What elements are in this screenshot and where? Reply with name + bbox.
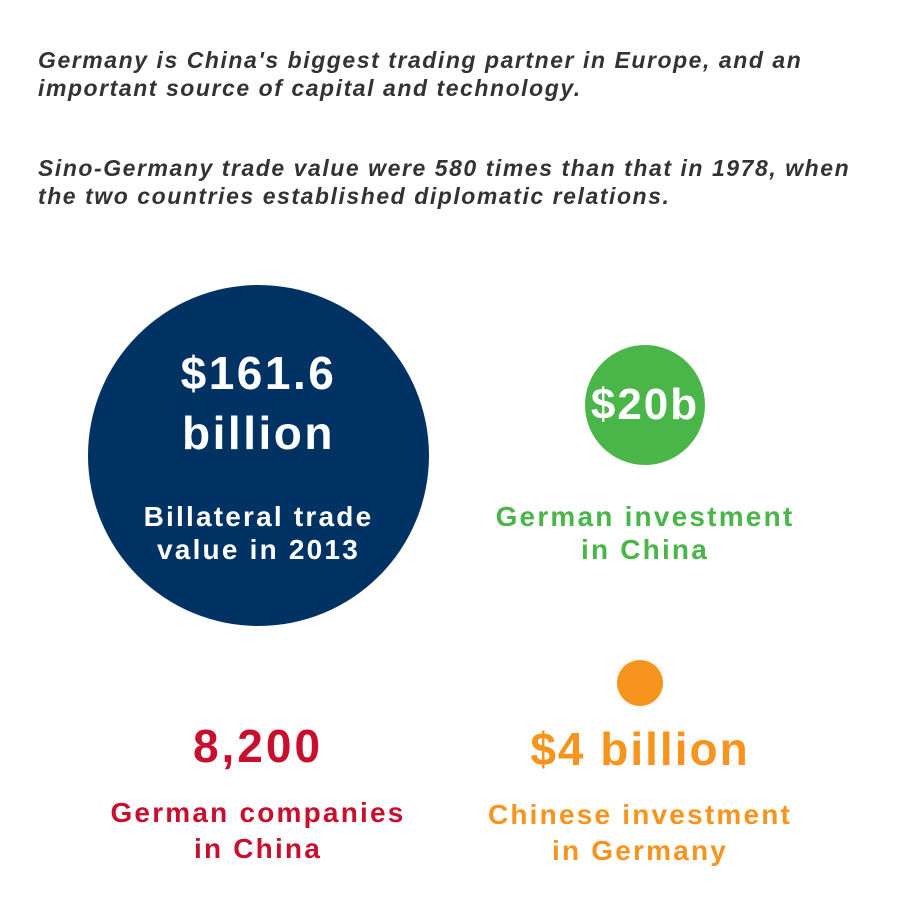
label: bilateral trade: Billateral trade: [144, 501, 373, 532]
label: bilateral trade: value in 2013: [157, 534, 360, 565]
panel: bilateral trade circle: [88, 285, 429, 626]
label: bilateral trade: [144, 501, 373, 565]
value: 8,200: 8,200: [193, 720, 323, 772]
intro text 1: [38, 47, 802, 101]
label: Chinese investment in Germany: Chinese investment: [488, 799, 792, 830]
label: German investment in China: [496, 501, 794, 565]
intro text 2: the two countries established diplomatic relations.: [38, 183, 670, 209]
label: German companies in China: German companies: [110, 797, 406, 828]
label: German companies in China: in China: [194, 833, 322, 864]
intro text 1: important source of capital and technology.: [38, 75, 582, 101]
green circle with $20b: $20b: [591, 380, 699, 429]
value: $161.6 billion: billion: [182, 407, 335, 459]
label: German companies in China: [110, 797, 406, 864]
value: $161.6 billion: [181, 347, 336, 459]
value: $161.6 billion: $161.6: [181, 347, 336, 399]
label: Chinese investment in Germany: in Germany: [552, 835, 728, 866]
panel: German companies: [110, 720, 406, 864]
label: Chinese investment in Germany: [488, 799, 792, 866]
intro text 1: Germany is China's biggest trading partner in Europe, and an: [38, 47, 802, 73]
panel: German investment: [496, 345, 794, 565]
panel: Chinese investment: [488, 660, 792, 866]
label: German investment in China: in China: [581, 534, 709, 565]
orange dot: [617, 660, 663, 706]
value: $4 billion: $4 billion: [530, 723, 750, 775]
green circle with $20b: [585, 345, 705, 465]
intro text 2: Sino-Germany trade value were 580 times than that in 1978, when: [38, 155, 850, 181]
intro text 2: [38, 155, 850, 209]
label: German investment in China: German investment: [496, 501, 794, 532]
